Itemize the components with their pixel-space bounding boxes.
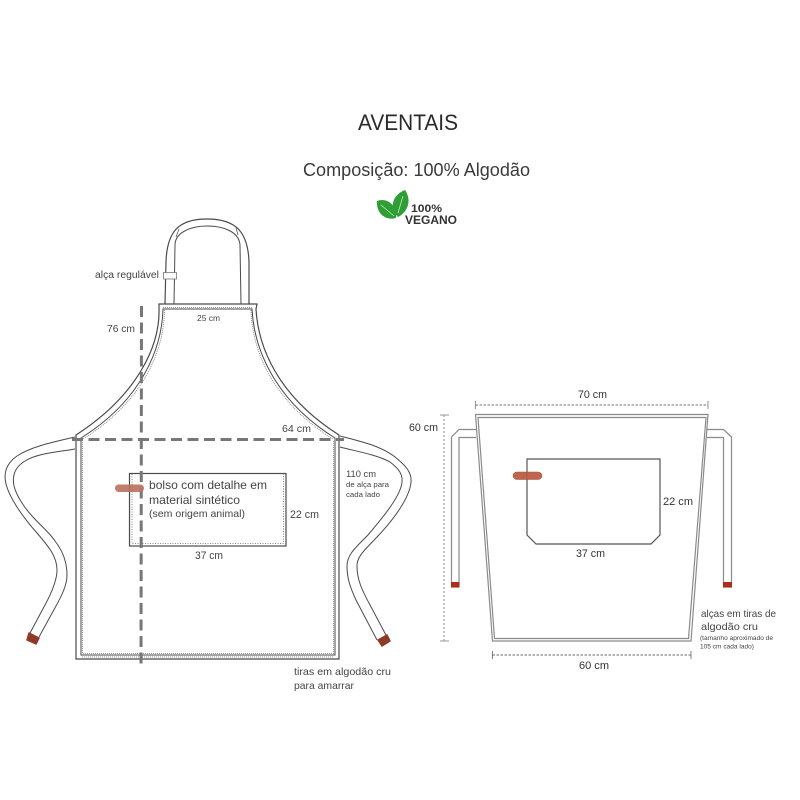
dimension line: 60 cm bottom — [492, 651, 691, 659]
text: waist apron straps note — [700, 608, 776, 650]
left tie tip — [27, 633, 39, 644]
dimension line: 70 cm — [476, 401, 708, 409]
waist pocket leather tab — [513, 472, 542, 480]
bib apron drawing — [5, 219, 411, 659]
text: 110 cm strap length: cada lado — [346, 490, 380, 499]
label: 64 cm: 64 cm — [282, 423, 311, 435]
label: 60 cm height: 60 cm — [409, 422, 438, 434]
text: waist apron straps note: 105 cm cada lado) — [700, 644, 754, 650]
title: AVENTAIS — [358, 110, 458, 135]
right apron tie — [340, 436, 411, 646]
text: 110 cm strap length: de alça para — [346, 480, 390, 489]
label: 60 cm bottom: 60 cm — [579, 660, 609, 672]
waist apron left tie — [451, 430, 476, 588]
text: 110 cm strap length — [346, 469, 390, 499]
left tie tip — [451, 582, 460, 588]
label: waist pocket 22 cm: 22 cm — [663, 496, 693, 508]
text: ties note: para amarrar — [294, 680, 354, 692]
measurement line: 64 cm width — [72, 438, 344, 441]
icon: vegan badge: VEGANO — [405, 215, 457, 227]
waist apron drawing — [451, 414, 732, 641]
measurement line: 76 cm height — [140, 306, 143, 665]
right tie tip — [723, 582, 732, 588]
bib pocket — [130, 474, 286, 546]
label: 76 cm: 76 cm — [107, 323, 135, 335]
waist apron body — [476, 414, 708, 641]
waist apron right tie — [707, 430, 732, 588]
text: waist apron straps note: alças em tiras de — [701, 608, 776, 620]
left apron tie — [5, 437, 75, 644]
text: waist apron straps note: (tamanho aproximado de — [700, 635, 773, 642]
icon: vegan badge: 100% — [411, 203, 442, 215]
label: 25 cm: 25 cm — [197, 313, 220, 323]
text: ties note — [294, 666, 391, 692]
adjustable strap buckle — [164, 272, 176, 279]
label: adjustable strap: alça regulável — [95, 270, 159, 281]
apron body — [76, 304, 339, 659]
text: waist apron straps note: algodão cru — [701, 621, 758, 633]
neck strap — [165, 219, 249, 304]
label: pocket 37 cm: 37 cm — [195, 550, 223, 562]
text: ties note: tiras em algodão cru — [294, 666, 391, 678]
subtitle: composition: Composição: 100% Algodão — [303, 160, 530, 180]
label: 70 cm: 70 cm — [578, 389, 607, 401]
text: pocket description: material sintético — [149, 493, 240, 507]
label: pocket 22 cm: 22 cm — [290, 509, 319, 521]
icon: vegan badge — [377, 190, 457, 227]
text: pocket description: bolso com detalhe em — [149, 478, 267, 492]
text: pocket description: (sem origem animal) — [149, 508, 245, 520]
label: waist pocket 37 cm: 37 cm — [576, 548, 605, 560]
text: pocket description — [149, 478, 267, 520]
bib pocket leather tab — [115, 484, 144, 492]
waist apron pocket — [527, 459, 660, 544]
dimension line: 60 cm height — [440, 415, 449, 641]
right tie tip — [378, 635, 390, 646]
text: 110 cm strap length: 110 cm — [346, 469, 376, 480]
